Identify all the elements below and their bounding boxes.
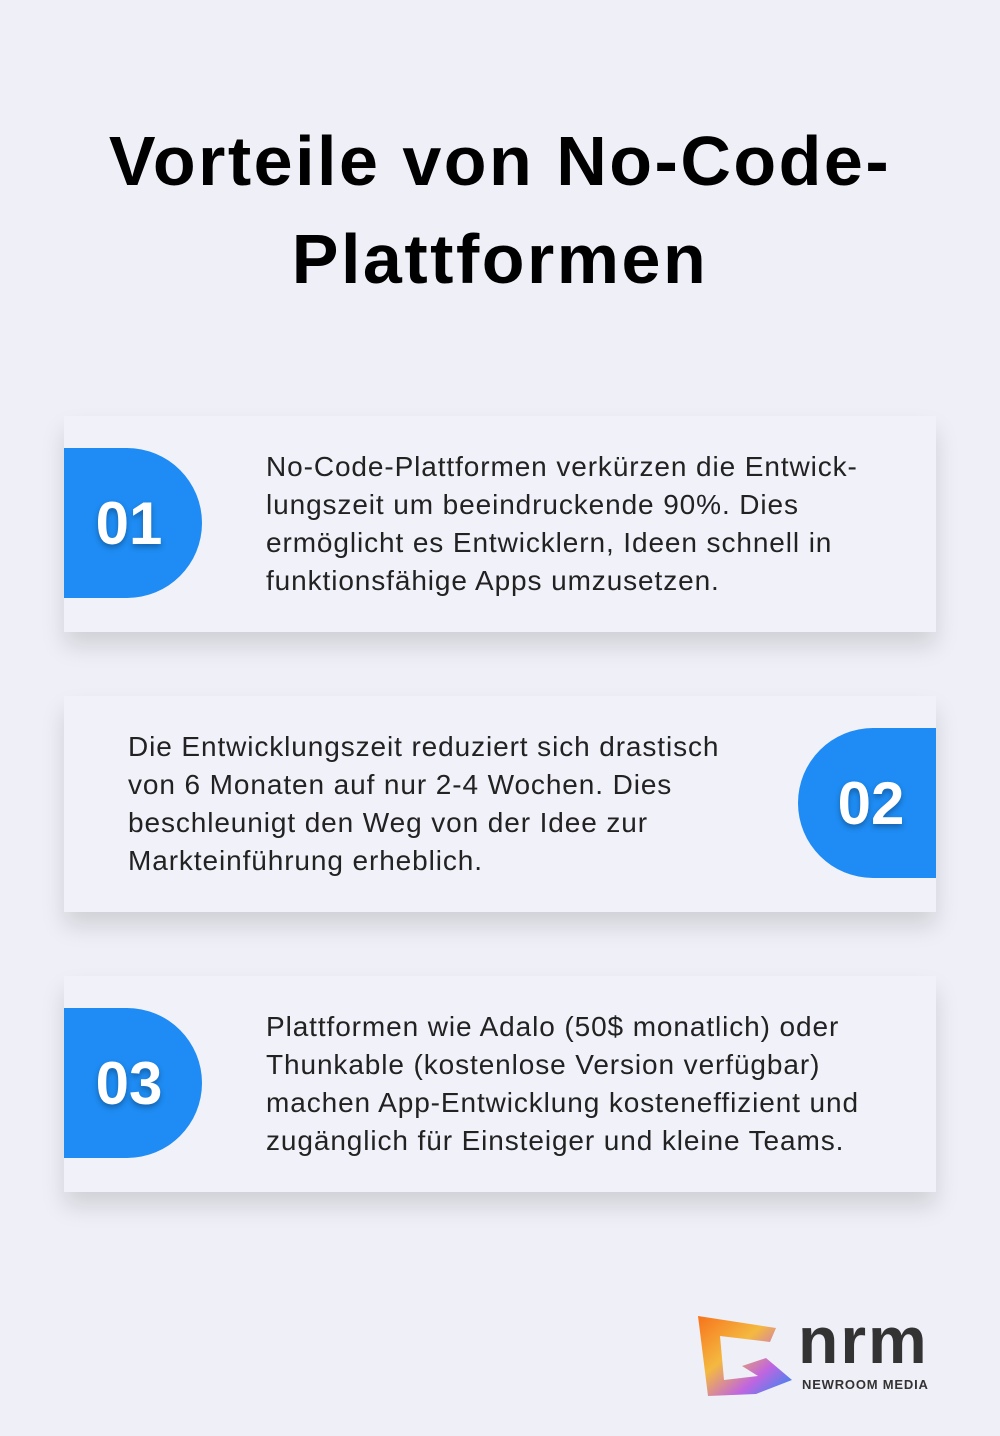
text 3: zugänglich für Einsteiger und kleine Teams.: [266, 1125, 844, 1156]
text 3: Plattformen wie Adalo (50$ monatlich) oder: [266, 1011, 839, 1042]
panel: card 3: [64, 976, 936, 1192]
badge 01: [64, 448, 202, 598]
text 1: [266, 451, 858, 596]
title: [109, 122, 891, 298]
text 1: lungszeit um beeindruckende 90%. Dies: [266, 489, 799, 520]
logo: NEWROOM MEDIA: [802, 1377, 929, 1392]
text 3: [266, 1011, 859, 1156]
logo: [698, 1303, 929, 1396]
badge 03: [64, 1008, 202, 1158]
text 3: machen App-Entwicklung kosteneffizient und: [266, 1087, 859, 1118]
panel: card 1: [64, 416, 936, 632]
text 1: No-Code-Plattformen verkürzen die Entwick-: [266, 451, 858, 482]
text 3: Thunkable (kostenlose Version verfügbar): [266, 1049, 820, 1080]
title: Plattformen: [292, 220, 708, 298]
text 2: von 6 Monaten auf nur 2-4 Wochen. Dies: [128, 769, 672, 800]
text 1: ermöglicht es Entwicklern, Ideen schnell in: [266, 527, 832, 558]
badge 01: 01: [96, 490, 162, 556]
title: Vorteile von No-Code-: [109, 122, 891, 200]
panel: card 2: [64, 696, 936, 912]
badge 02: [798, 728, 936, 878]
text 2: Die Entwicklungszeit reduziert sich drastisch: [128, 731, 719, 762]
brand text: nrm: [798, 1303, 929, 1377]
text 2: beschleunigt den Weg von der Idee zur: [128, 807, 648, 838]
text 1: funktionsfähige Apps umzusetzen.: [266, 565, 720, 596]
badge 02: 02: [838, 770, 904, 836]
icon: logo mark: [698, 1316, 792, 1396]
text 2: Markteinführung erheblich.: [128, 845, 483, 876]
badge 03: 03: [96, 1050, 162, 1116]
text 2: [128, 731, 719, 876]
